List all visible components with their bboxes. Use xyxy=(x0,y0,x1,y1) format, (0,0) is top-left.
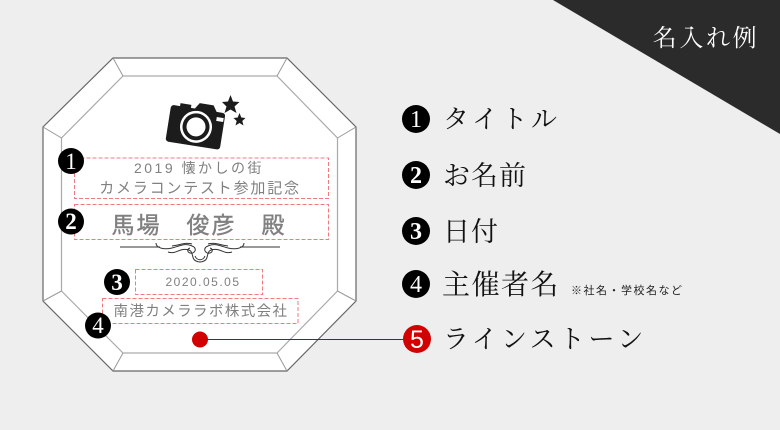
leader line xyxy=(200,338,405,340)
legend item 2: name: 2 xyxy=(410,163,422,189)
title text: 2019 懐かしの街 xyxy=(134,160,264,176)
date text: 2020.05.05 xyxy=(165,275,241,289)
legend item 5: rhinestone: 5 xyxy=(410,326,424,354)
legend item 4: organizer: 主催者名 xyxy=(442,269,560,301)
marker 4 on trophy xyxy=(85,312,111,338)
title text: カメラコンテスト参加記念 xyxy=(99,180,301,197)
title dashed box xyxy=(74,158,328,198)
organizer note: ※社名・学校名など xyxy=(571,283,684,297)
marker 2 on trophy xyxy=(58,208,84,234)
legend item 4: organizer xyxy=(402,269,684,301)
legend item 1: title: タイトル xyxy=(443,105,560,134)
marker 3 on trophy xyxy=(104,269,130,295)
legend item 3: date xyxy=(402,217,499,247)
organizer text: 南港カメララボ株式会社 xyxy=(114,303,288,320)
legend item 4: organizer: 4 xyxy=(410,272,422,298)
legend item 3: date: 日付 xyxy=(443,217,499,247)
legend item 3: date: 3 xyxy=(410,219,422,245)
ornament divider xyxy=(120,243,280,262)
marker 1 on trophy: 1 xyxy=(65,149,77,174)
organizer dashed box xyxy=(102,298,298,324)
date dashed box xyxy=(136,270,262,294)
title text xyxy=(99,160,301,197)
name dashed box xyxy=(74,204,328,240)
icon: camera with stars xyxy=(165,95,246,150)
legend item 2: name xyxy=(402,161,527,191)
name text: 馬場 俊彦 殿 xyxy=(112,212,286,238)
rhinestone dot xyxy=(192,332,208,348)
legend item 1: title: 1 xyxy=(410,107,422,133)
corner banner xyxy=(553,0,780,134)
marker 2 on trophy: 2 xyxy=(65,209,77,234)
marker 4 on trophy: 4 xyxy=(92,313,104,338)
legend item 5: rhinestone: ラインストーン xyxy=(443,325,647,354)
marker 3 on trophy: 3 xyxy=(111,270,123,295)
marker 1 on trophy xyxy=(58,148,84,174)
panel: octagonal trophy xyxy=(43,58,356,371)
legend item 2: name: お名前 xyxy=(443,161,527,191)
banner label: 名入れ例 xyxy=(653,25,759,52)
